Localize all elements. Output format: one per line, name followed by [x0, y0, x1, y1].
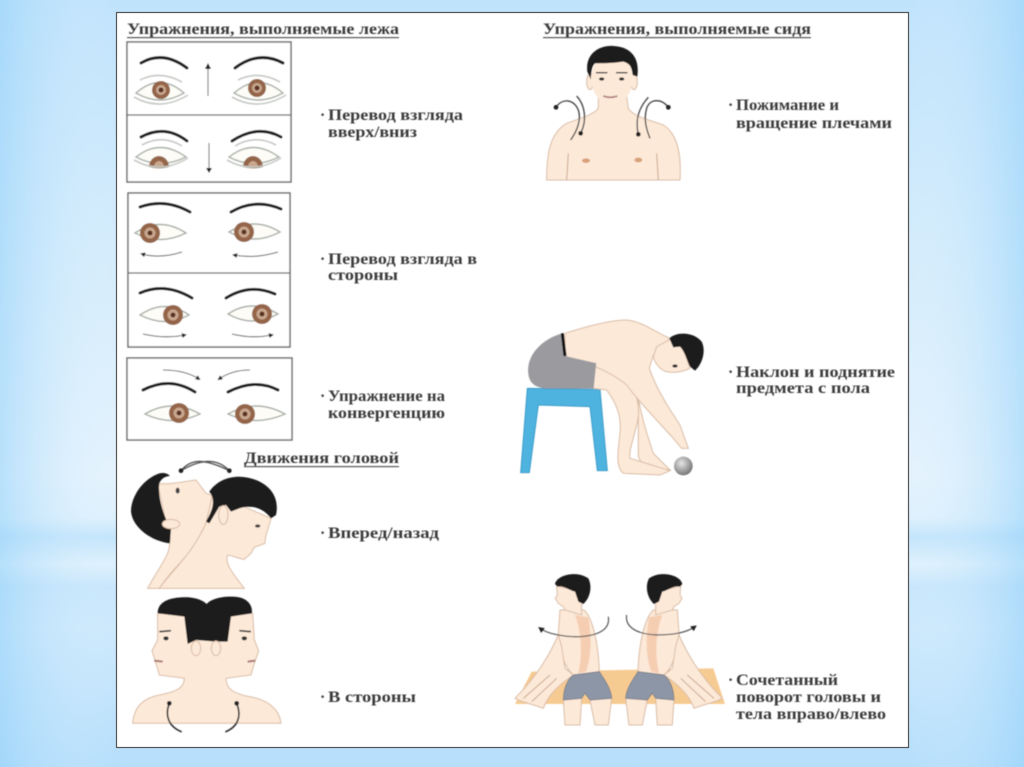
mat	[515, 668, 725, 704]
panel: eyes sideways	[128, 193, 290, 347]
label: bend and lift	[728, 364, 895, 397]
figure: boy turned right	[626, 574, 722, 725]
label: shoulder shrug	[728, 97, 892, 132]
figure: bending forward on a stool	[521, 320, 704, 475]
panel: convergence	[127, 358, 292, 440]
label: combined twist: поворот головы и	[736, 689, 881, 706]
icon: eyes looking down	[134, 131, 281, 168]
icon: eyes looking left	[135, 203, 281, 256]
label: combined twist: ·	[728, 672, 733, 689]
label: to the sides: ·	[320, 689, 325, 706]
label: up and down: ·	[320, 107, 325, 124]
label: convergence: Упражнение на	[328, 388, 445, 405]
figure: head turned to sides	[133, 597, 281, 732]
figure: seated body twist	[515, 574, 725, 725]
arrows: shoulder rotation	[554, 96, 671, 140]
heading: exercises lying down: Упражнения, выполняемые лежа	[127, 21, 399, 38]
label: sideways gaze	[320, 251, 477, 284]
label: convergence: ·	[320, 388, 325, 405]
arrow: up	[205, 63, 211, 96]
label: forward and back: Вперед/назад	[328, 525, 439, 542]
label: sideways gaze: Перевод взгляда в	[328, 251, 477, 268]
label: combined twist: Сочетанный	[736, 672, 838, 689]
label: to the sides: В стороны	[328, 689, 416, 706]
label: convergence: конвергенцию	[328, 405, 445, 422]
figure: head forward and back	[131, 461, 277, 588]
label: bend and lift: Наклон и поднятие	[736, 364, 895, 381]
figure: boy turned left	[515, 574, 612, 725]
label: sideways gaze: стороны	[328, 267, 398, 284]
icon: eyes looking up	[134, 58, 286, 104]
label: shoulder shrug: Пожимание и	[736, 97, 839, 114]
label: shoulder shrug: вращение плечами	[736, 115, 892, 132]
label: forward and back: ·	[320, 525, 325, 542]
label: up and down: Перевод взгляда	[328, 107, 463, 124]
figure: shoulder shrug	[547, 46, 680, 180]
heading: exercises sitting: Упражнения, выполняемые сидя	[543, 21, 812, 38]
icon: eyes looking right	[140, 289, 278, 337]
label: shoulder shrug: ·	[728, 97, 733, 114]
label: combined twist: тела вправо/влево	[736, 706, 886, 723]
white content panel	[116, 12, 908, 748]
stool	[521, 388, 607, 473]
heading: head movements: Движения головой	[244, 450, 399, 467]
label: convergence	[320, 388, 445, 422]
ball	[674, 457, 693, 475]
label: sideways gaze: ·	[320, 251, 325, 268]
label: up and down	[320, 107, 463, 141]
arrows: twist	[540, 615, 695, 637]
label: bend and lift: ·	[728, 364, 733, 381]
label: combined twist	[728, 672, 886, 723]
label: up and down: вверх/вниз	[328, 124, 417, 141]
label: bend and lift: предмета с пола	[736, 380, 870, 397]
arrow: down	[206, 143, 212, 173]
panel: eyes up and down	[127, 42, 291, 182]
